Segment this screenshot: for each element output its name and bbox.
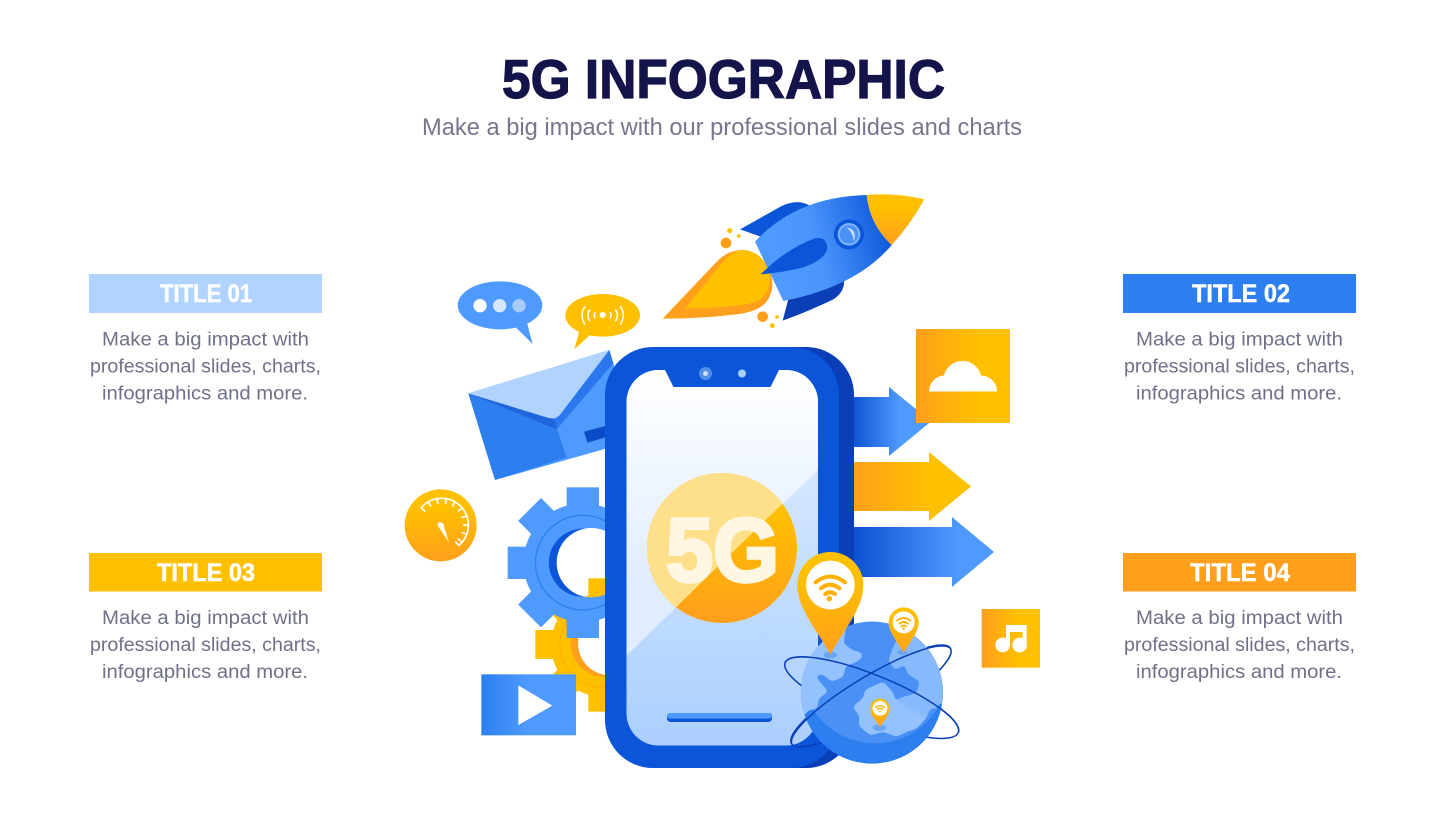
orbit back (777, 631, 967, 761)
text block 03 (90, 608, 321, 683)
phone notch (660, 368, 784, 387)
pin: large wifi (797, 552, 863, 658)
subtitle: Make a big impact with our professional slides and charts (422, 114, 1022, 141)
panel: title 01 (89, 274, 322, 404)
icon: video play box (481, 674, 576, 735)
icon: yellow gear (535, 578, 670, 712)
arrow: orange middle (850, 452, 971, 521)
icon: rocket (663, 194, 924, 328)
title: 5G INFOGRAPHIC (502, 48, 945, 110)
icon: speedometer (405, 489, 477, 561)
icon: blue speech bubble (458, 281, 542, 344)
phone front (605, 347, 839, 768)
globe (801, 622, 943, 764)
text block 02: infographics and more. (1136, 384, 1342, 404)
text block 04: infographics and more. (1136, 662, 1342, 683)
pin: medium wifi (889, 607, 919, 655)
home bar (667, 713, 772, 722)
text block 02 (1124, 330, 1355, 404)
phone screen (626, 370, 818, 746)
phone camera (699, 367, 746, 380)
panel: title 03 (89, 553, 322, 683)
heading bar 03 (89, 553, 322, 592)
panel: title 04 (1123, 553, 1356, 683)
text block 03: Make a big impact with (102, 608, 309, 629)
text block 03: professional slides, charts, (90, 635, 321, 656)
icon: blue gear (508, 487, 605, 638)
pin: small wifi (870, 699, 890, 731)
text block 02: professional slides, charts, (1124, 356, 1355, 378)
heading 02: TITLE 02 (1192, 280, 1290, 308)
icon: yellow signal bubble (565, 294, 640, 349)
globe with orbits and pins (777, 552, 967, 764)
text block 04: professional slides, charts, (1124, 635, 1355, 656)
orbit front (785, 646, 959, 744)
heading bar 04 (1123, 553, 1356, 592)
icon: envelope (468, 350, 637, 480)
phone back (625, 347, 854, 768)
text block 02: Make a big impact with (1136, 330, 1343, 350)
heading 03: TITLE 03 (157, 559, 255, 587)
text block 03: infographics and more. (102, 662, 308, 683)
heading bar 02 (1123, 274, 1356, 313)
phone (605, 347, 854, 768)
heading 04: TITLE 04 (1190, 559, 1290, 587)
arrow: blue top (850, 387, 931, 456)
arrow: blue bottom (850, 517, 994, 587)
5G badge (647, 473, 797, 623)
panel: title 02 (1123, 274, 1356, 404)
needle (438, 522, 449, 542)
text block 04 (1124, 608, 1355, 683)
heading bar 01 (89, 274, 322, 313)
text block 01 (90, 330, 321, 404)
icon: cloud tile (916, 329, 1010, 423)
5G label: 5G (666, 501, 779, 601)
heading 01: TITLE 01 (160, 280, 252, 308)
text block 01: Make a big impact with (102, 330, 309, 350)
text block 04: Make a big impact with (1136, 608, 1343, 629)
text block 01: professional slides, charts, (90, 356, 321, 378)
icon: music tile (982, 609, 1040, 668)
text block 01: infographics and more. (102, 384, 308, 404)
